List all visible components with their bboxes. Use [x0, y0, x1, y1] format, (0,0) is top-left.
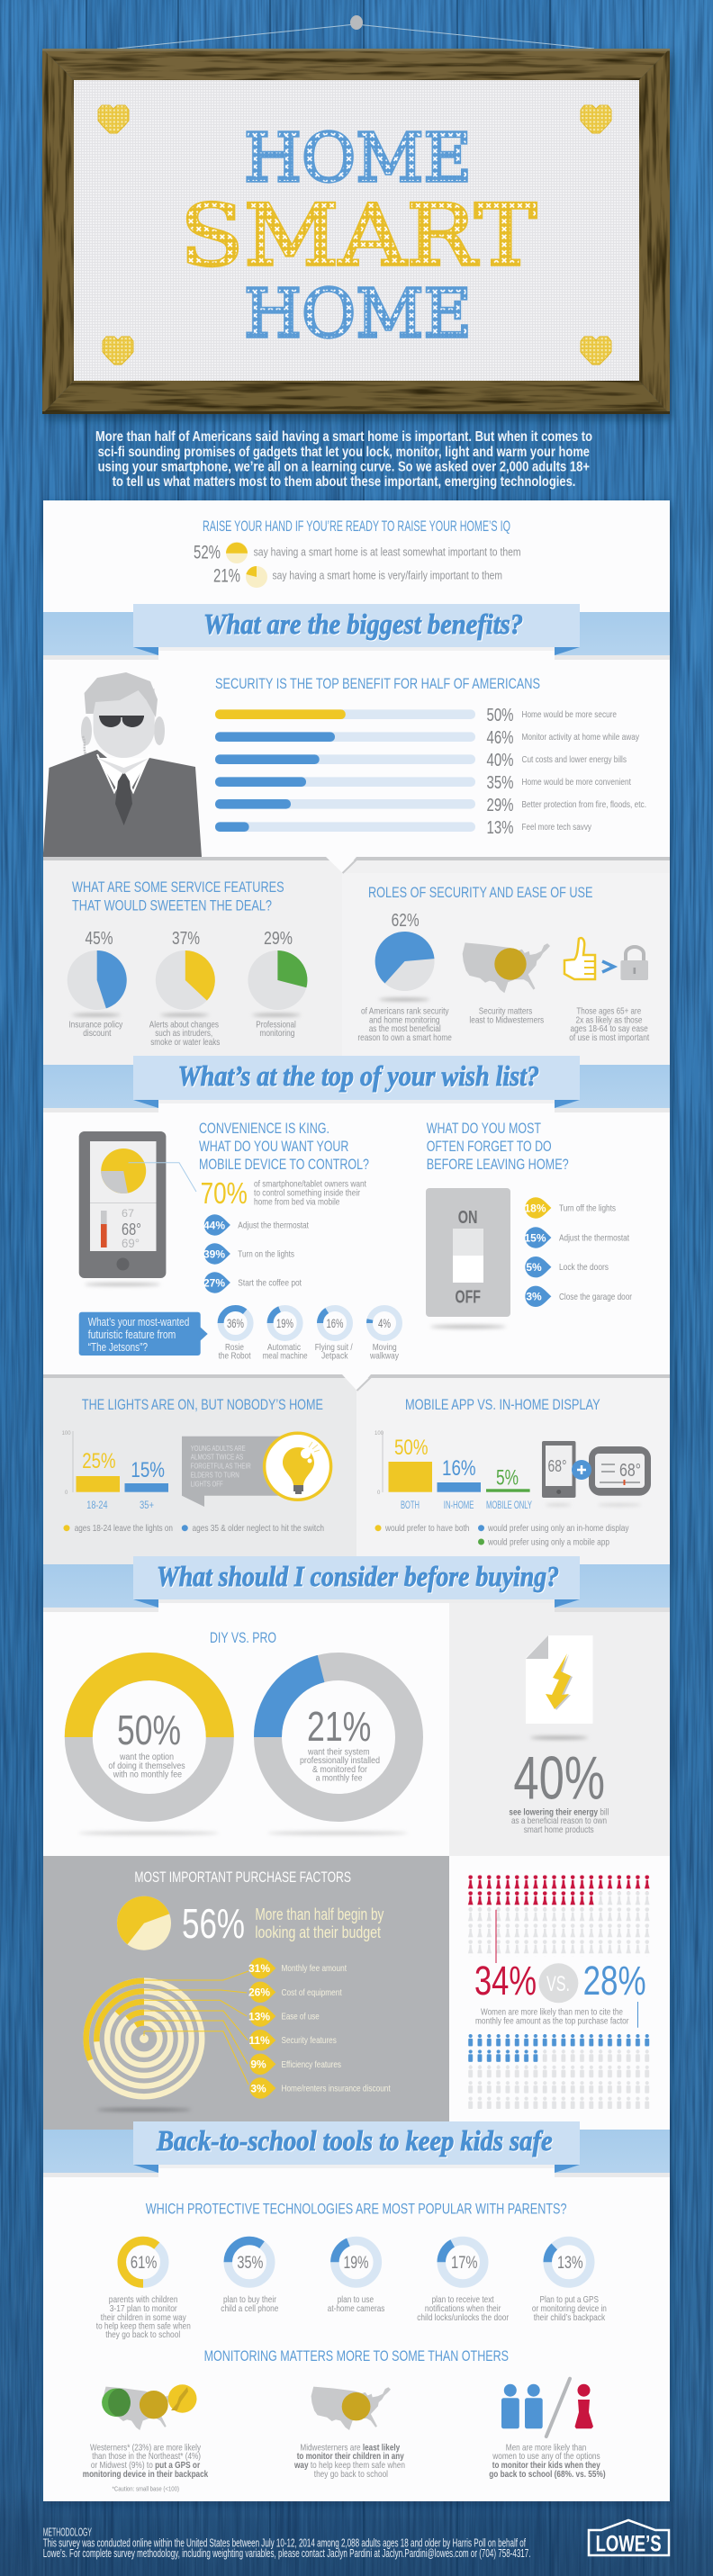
map: west, midwest, northeast — [102, 2384, 197, 2430]
pie: 45% insurance discount: 45% — [85, 929, 113, 949]
list: device controls: 44% — [203, 1219, 225, 1231]
list: forgotten tasks: Turn off the lights — [559, 1202, 616, 1213]
caption: Women are more likely than men to cite the — [481, 2007, 623, 2018]
donut: 13% GPS — [532, 2241, 607, 2323]
list: forgotten tasks — [524, 1197, 632, 1307]
bar chart: lights by age: 25% — [82, 1449, 116, 1473]
icon: tablet — [79, 1131, 196, 1286]
stat: 70%: 70% — [201, 1176, 248, 1210]
bar 46%: 46% — [486, 728, 514, 748]
stat: 21%: 21% — [213, 565, 240, 587]
stat: 34% vs 28%: 34% — [474, 1958, 537, 2004]
donut: 21% pro: want their system — [307, 1746, 370, 1757]
bar chart: display preference: 50% — [394, 1436, 429, 1460]
pie: 62%: reason to own a smart home — [357, 1032, 452, 1043]
donut: 17% notifications — [417, 2241, 510, 2323]
pie: 56% budget: 56% — [182, 1900, 245, 1947]
donut: 50% DIY — [78, 1667, 220, 1834]
donut: 4% moving walkway: Moving — [373, 1342, 397, 1353]
donut: 61% parents: they go back to school — [105, 2329, 180, 2340]
shirt — [97, 758, 149, 801]
heading: WHAT ARE SOME SERVICE FEATURES — [72, 878, 284, 896]
bar chart: lights by age: 100 — [62, 1431, 71, 1437]
bar chart: display preference: 0 — [377, 1491, 381, 1496]
heading: DIY VS. PRO — [210, 1629, 276, 1646]
bar chart: lights by age: 15% — [131, 1458, 165, 1482]
callout: young adults — [182, 1437, 290, 1507]
donut: 50% DIY: want the option — [119, 1752, 174, 1762]
icon: thumb greater than lock: 2x as likely as those — [576, 1015, 643, 1026]
panel: raise your hand — [194, 518, 521, 588]
caption: men: to monitor their kids when they — [492, 2460, 600, 2471]
list: device controls: Start the coffee pot — [238, 1278, 302, 1289]
pictogram: men — [466, 2002, 652, 2112]
donut: 61% parents: parents with children — [109, 2294, 178, 2305]
panel: service features and roles background — [43, 857, 670, 1065]
icon: phone plus thermostat: 68° — [547, 1457, 567, 1475]
bar chart: display preference: 100 — [375, 1431, 384, 1437]
callout: Jetsons question: “The Jetsons”? — [88, 1340, 148, 1354]
tie — [115, 771, 132, 825]
donut: 61% parents — [96, 2241, 191, 2340]
icon: thumb greater than lock: of use is most important — [569, 1032, 649, 1043]
main white panel — [43, 500, 672, 2504]
list: device controls: 27% — [203, 1276, 225, 1289]
bar 50% — [215, 706, 617, 725]
bar chart: display preference: MOBILE ONLY — [486, 1499, 532, 1511]
icon: light switch: ON — [458, 1208, 477, 1228]
picture frame with cross-stitch title — [42, 49, 672, 419]
bar chart: lights by age: 0 — [65, 1491, 68, 1496]
icon: phone plus thermostat: 68° — [619, 1461, 641, 1481]
heading: BEFORE LEAVING HOME? — [427, 1156, 569, 1173]
ribbon: What are the biggest benefits? — [43, 604, 670, 660]
bar chart: lights by age — [62, 1431, 168, 1511]
legend: lights: ages 35 & older neglect to hit the switch — [193, 1523, 324, 1534]
pie: 29% professional monitoring: 29% — [264, 929, 293, 949]
caption: men: women to use any of the options — [492, 2451, 600, 2462]
stat: 21% — [213, 565, 502, 588]
stat: 70%: to control something inside their — [254, 1188, 360, 1199]
caption: midwesterners: Midwesterners are least likely — [300, 2443, 400, 2454]
panel: most important purchase factors — [43, 1856, 449, 2130]
donut: 61% parents: 3-17 plan to monitor — [110, 2303, 177, 2314]
icon: stitched hearts — [98, 105, 611, 365]
donut: 4% moving walkway: walkway — [369, 1350, 400, 1361]
methodology footer — [43, 2526, 530, 2560]
donut: 36% Rosie the Robot: 36% — [227, 1316, 244, 1330]
intro paragraph: to tell us what matters most to them about these important, emerging technologies. — [113, 474, 575, 490]
pie: 37% alerts: such as intruders, — [155, 1028, 212, 1039]
intro paragraph: sci-fi sounding promises of gadgets that let you lock, monitor, light and warm your home — [98, 445, 590, 460]
callout: young adults: YOUNG ADULTS ARE — [191, 1444, 246, 1453]
bar 13%: 13% — [486, 818, 514, 838]
donut: 21% pro: & monitored for — [312, 1764, 367, 1775]
callout: Jetsons question — [79, 1312, 208, 1356]
pie: 56% budget: More than half begin by — [255, 1905, 384, 1923]
donut: 19% cameras: plan to use — [338, 2294, 374, 2305]
bar 13% — [215, 818, 592, 838]
donut: 19% cameras: 19% — [344, 2253, 369, 2273]
list: purchase factors: 31% — [248, 1962, 270, 1975]
pie: 62%: and home monitoring — [369, 1015, 440, 1026]
caption: men — [489, 2443, 606, 2480]
heading — [427, 1120, 569, 1173]
bar 40%: Cut costs and lower energy bills — [522, 754, 627, 765]
bar 50%: Home would be more secure — [522, 709, 617, 720]
callout: young adults: FORGETFUL AS THEIR — [191, 1461, 251, 1470]
panel: convenience is king — [79, 1120, 400, 1361]
donut: 36% Rosie the Robot: the Robot — [219, 1350, 251, 1361]
donut: 16% flying suit: Jetpack — [321, 1350, 348, 1361]
stat: 52%: 52% — [194, 542, 221, 563]
ears — [81, 716, 92, 745]
donut: 36% Rosie the Robot: Rosie — [225, 1342, 244, 1353]
bar 35%: 35% — [486, 773, 514, 793]
donut: 36% Rosie the Robot — [219, 1309, 251, 1361]
list: forgotten tasks: Adjust the thermostat — [559, 1233, 629, 1244]
caption: westerners — [83, 2443, 208, 2480]
chart: concentric purchase rings — [86, 1971, 248, 2112]
donut: 16% flying suit — [315, 1309, 353, 1361]
heading: OFTEN FORGET TO DO — [427, 1138, 552, 1155]
icon: light switch: OFF — [456, 1287, 481, 1307]
stat: 21%: say having a smart home is very/fairly important to them — [272, 569, 502, 581]
pie: 62% — [357, 911, 452, 1043]
heading: WHICH PROTECTIVE TECHNOLOGIES ARE MOST POPULAR WITH PARENTS? — [146, 2200, 566, 2218]
pie: 29% professional monitoring: Professional — [256, 1019, 296, 1030]
list: purchase factors — [248, 1958, 391, 2099]
icon: thumb greater than lock: ages 18-64 to say ease — [571, 1023, 648, 1034]
stat: 34% vs 28%: VS. — [546, 1972, 570, 1996]
legend: display preference: would prefer to have both — [384, 1523, 470, 1534]
donut: 35% cell phone: 35% — [237, 2253, 263, 2273]
panel: energy bill stat — [509, 1635, 609, 1835]
donut: 17% notifications: child locks/unlocks the door — [417, 2312, 510, 2323]
ribbon: What's at the top of your wish list? — [43, 1056, 670, 1112]
donut: 4% moving walkway: 4% — [378, 1316, 391, 1330]
list: forgotten tasks: Lock the doors — [559, 1262, 609, 1273]
donut: 21% pro: a monthly fee — [316, 1773, 363, 1784]
caption: westerners: Westerners* (23%) are more likely — [90, 2443, 202, 2454]
pie: 45% insurance discount: Insurance policy — [68, 1019, 123, 1030]
caption: westerners: monitoring device in their backpack — [83, 2469, 208, 2480]
donut: 50% DIY: 50% — [117, 1707, 181, 1753]
stat: 52%: say having a smart home is at least somewhat important to them — [254, 545, 521, 558]
list: device controls: 39% — [203, 1247, 225, 1260]
stat: 70% — [201, 1176, 366, 1210]
suit — [43, 750, 202, 857]
pie: 37% alerts — [149, 929, 220, 1048]
callout: Jetsons question: futuristic feature from — [88, 1328, 176, 1341]
donut: 19% meal machine: Automatic — [267, 1342, 301, 1353]
list: purchase factors: Efficiency features — [281, 2059, 341, 2070]
donut: 19% meal machine: 19% — [276, 1316, 293, 1330]
legend: display preference — [375, 1523, 629, 1548]
icon: tablet: 69° — [122, 1236, 140, 1250]
icon: men versus women — [501, 2379, 593, 2436]
caption: monthly fee amount as the top purchase factor — [475, 2016, 629, 2027]
list: purchase factors: Security features — [281, 2035, 337, 2046]
list: forgotten tasks: 3% — [526, 1291, 542, 1303]
legend: lights — [63, 1523, 324, 1534]
title line: HOME: HOME — [244, 275, 472, 353]
wooden frame — [42, 49, 670, 414]
bar 29% — [215, 796, 646, 815]
donut: 61% parents: their children in some way — [101, 2312, 186, 2323]
list: device controls: Turn on the lights — [238, 1249, 294, 1260]
pie: 56% budget: looking at their budget — [255, 1923, 381, 1941]
donut: 19% meal machine — [263, 1309, 308, 1361]
donut: 19% cameras: at-home cameras — [328, 2303, 384, 2314]
donut: 21% pro — [267, 1667, 409, 1834]
bar chart: lights by age: 18-24 — [86, 1499, 108, 1511]
list: purchase factors: 9% — [250, 2058, 266, 2071]
bar 46% — [215, 728, 640, 748]
logo: Lowe's — [589, 2520, 669, 2556]
panel: monitoring matters — [83, 2347, 606, 2493]
bar 50%: 50% — [486, 706, 514, 725]
ribbon: Back-to-school tools to keep kids safe: Back-to-school tools to keep kids safe — [156, 2124, 553, 2157]
ribbon: What's at the top of your wish list?: What’s at the top of your wish list? — [178, 1059, 539, 1092]
callout: young adults: ALMOST TWICE AS — [191, 1453, 243, 1462]
stat: 40%: as a beneficial reason to own — [511, 1815, 607, 1826]
bar 40% — [215, 751, 627, 770]
icon: phone plus thermostat — [542, 1441, 651, 1506]
panel: roles of security and ease of use — [357, 884, 649, 1043]
donut: 50% DIY: of doing it themselves — [108, 1761, 185, 1771]
donut: 50% DIY: with no monthly fee — [113, 1770, 182, 1780]
donut charts: Jetsons features — [219, 1309, 400, 1361]
donut: 4% moving walkway — [369, 1309, 400, 1361]
pie: 62%: as the most beneficial — [369, 1023, 441, 1034]
heading: CONVENIENCE IS KING. — [199, 1120, 329, 1137]
stat: 70%: of smartphone/tablet owners want — [254, 1179, 366, 1190]
bar chart: display preference — [375, 1431, 532, 1511]
caption — [475, 2007, 629, 2027]
donut: 35% cell phone — [221, 2241, 278, 2314]
donut: 35% cell phone: plan to buy their — [223, 2294, 276, 2305]
legend: display preference: would prefer using only a mobile app — [487, 1537, 609, 1548]
list: forgotten tasks: 18% — [524, 1202, 546, 1214]
pie: 37% alerts: 37% — [172, 929, 200, 949]
list: purchase factors: Ease of use — [281, 2011, 320, 2022]
donut: 35% cell phone: child a cell phone — [221, 2303, 278, 2314]
bar chart: display preference: BOTH — [401, 1499, 420, 1511]
list: forgotten tasks: 15% — [524, 1231, 546, 1244]
donut: 13% GPS: 13% — [557, 2253, 583, 2273]
footnote: *Caution: small base (<100) — [112, 2484, 179, 2493]
stat: 40%: see lowering their energy bill — [509, 1807, 609, 1818]
caption: midwesterners: they go back to school — [314, 2469, 388, 2480]
bar 13%: Feel more tech savvy — [522, 822, 592, 833]
icon: thumb greater than lock — [564, 938, 649, 1043]
stat: 70%: home from bed via mobile — [254, 1197, 340, 1208]
heading: THE LIGHTS ARE ON, BUT NOBODY’S HOME — [82, 1396, 323, 1413]
bar chart: display preference: IN-HOME — [444, 1499, 474, 1511]
icon: document with lightning — [526, 1635, 592, 1739]
bar 29%: 29% — [486, 796, 514, 815]
heading: MONITORING MATTERS MORE TO SOME THAN OTHERS — [204, 2347, 509, 2364]
pie: 62%: of Americans rank security — [361, 1006, 449, 1017]
map: midwest — [463, 942, 550, 1026]
caption: midwesterners — [293, 2443, 405, 2480]
donut: 17% notifications: notifications when their — [425, 2303, 501, 2314]
pictogram: women — [466, 1875, 652, 1963]
methodology footer: METHODOLOGY — [43, 2526, 92, 2538]
caption: westerners: or Midwest (9%) to put a GPS or — [91, 2460, 200, 2471]
heading: THAT WOULD SWEETEN THE DEAL? — [72, 897, 272, 914]
stat: 52% — [194, 542, 521, 563]
bar chart: benefits — [215, 706, 646, 838]
donut: 16% flying suit: 16% — [326, 1316, 344, 1330]
ribbon: What are the biggest benefits?: What are the biggest benefits? — [203, 608, 523, 640]
donut: 17% notifications: 17% — [451, 2253, 477, 2273]
heading: WHAT DO YOU MOST — [427, 1120, 541, 1137]
panel: lights and display background — [43, 1374, 670, 1564]
caption: men: Men are more likely than — [506, 2443, 586, 2454]
bar 29%: Better protection from fire, floods, etc. — [522, 799, 646, 810]
caption: midwesterners: way to help keep them safe when — [293, 2460, 405, 2471]
map: midwest: least to Midwesterners — [469, 1015, 544, 1026]
list: purchase factors: Home/renters insurance discount — [281, 2083, 391, 2094]
intro paragraph: More than half of Americans said having a smart home is important. But when it comes to — [95, 429, 592, 445]
panel: mobile app vs in-home display — [375, 1396, 651, 1548]
callout: young adults: LIGHTS OFF — [191, 1479, 223, 1488]
bar chart: display preference: 5% — [496, 1465, 519, 1491]
pie: 29% professional monitoring — [248, 929, 307, 1039]
donut: 13% GPS: or monitoring device in — [532, 2303, 607, 2314]
list: device controls: Adjust the thermostat — [238, 1220, 309, 1231]
list: purchase factors: 3% — [250, 2082, 266, 2094]
stat: 40% — [509, 1744, 609, 1835]
caption: men: go back to school (68%. vs. 55%) — [489, 2469, 606, 2480]
map: midwest — [311, 2387, 391, 2430]
bar 46%: Monitor activity at home while away — [522, 732, 640, 743]
ribbon: What should I consider before buying?: What should I consider before buying? — [157, 1560, 559, 1592]
heading: MOBILE DEVICE TO CONTROL? — [199, 1156, 369, 1173]
donut: 61% parents: 61% — [131, 2253, 157, 2273]
heading — [199, 1120, 369, 1173]
bar chart: display preference: 16% — [442, 1456, 476, 1481]
intro paragraph: using your smartphone, we’re all on a learning curve. So we asked over 2,000 adults 18+ — [98, 459, 590, 475]
panel: forget before leaving home — [426, 1120, 632, 1329]
callout: Jetsons question: What’s your most-wanted — [88, 1315, 189, 1329]
panel: energy bill background — [449, 1599, 670, 1856]
donut: 19% cameras — [328, 2241, 384, 2314]
callout: young adults: ELDERS TO TURN — [191, 1470, 239, 1479]
pie: 37% alerts: Alerts about changes — [149, 1019, 219, 1030]
heading: MOBILE APP VS. IN-HOME DISPLAY — [405, 1396, 600, 1413]
pie: 45% insurance discount — [68, 929, 127, 1039]
list: purchase factors: Monthly fee amount — [281, 1963, 347, 1974]
list: purchase factors: Cost of equipment — [281, 1987, 342, 1998]
bar chart: lights by age: 35+ — [140, 1499, 154, 1511]
stat: 40%: smart home products — [524, 1824, 594, 1835]
panel: DIY vs pro — [78, 1629, 409, 1834]
legend: lights: ages 18-24 leave the lights on — [75, 1523, 173, 1534]
pie: 37% alerts: smoke or water leaks — [150, 1037, 220, 1048]
bar 35% — [215, 773, 631, 793]
cross-stitch canvas — [74, 80, 639, 381]
heading: RAISE YOUR HAND IF YOU’RE READY TO RAISE YOUR HOME’S IQ — [203, 518, 510, 535]
intro paragraph — [95, 429, 592, 490]
heading: ROLES OF SECURITY AND EASE OF USE — [368, 884, 592, 901]
pie: 56% budget — [117, 1896, 384, 1950]
heading: WHAT DO YOU WANT YOUR — [199, 1138, 348, 1155]
list: purchase factors: 11% — [248, 2034, 270, 2047]
donut: 13% GPS: Plan to put a GPS — [540, 2294, 599, 2305]
icon: light bulb — [265, 1433, 331, 1500]
list: purchase factors: 13% — [248, 2010, 270, 2022]
logo: Lowe's: LOWE’S — [596, 2531, 662, 2556]
icon: tablet: 68° — [122, 1220, 141, 1238]
panel: protective technologies — [96, 2200, 607, 2340]
panel: women vs men — [466, 1875, 652, 2112]
ribbon: Back-to-school tools to keep kids safe — [43, 2121, 670, 2177]
stat: 34% vs 28%: 28% — [583, 1958, 646, 2004]
panel: service features — [68, 878, 307, 1048]
stat: 40%: 40% — [513, 1744, 605, 1813]
legend: display preference: would prefer using only an in-home display — [487, 1523, 629, 1534]
map: midwest: Security matters — [479, 1006, 532, 1017]
earpiece — [83, 736, 86, 754]
panel: lights are on — [62, 1396, 331, 1534]
illustration: security man — [43, 672, 202, 857]
pie: 62%: 62% — [392, 911, 420, 931]
title line: HOME: HOME — [244, 120, 472, 197]
hair — [85, 672, 158, 717]
donut: 21% pro: 21% — [307, 1703, 371, 1750]
donut: 21% pro: professionally installed — [300, 1755, 380, 1766]
caption: westerners: than those in the Northeast* (4%) — [92, 2451, 201, 2462]
hanging nail and string — [117, 15, 594, 49]
donut: 16% flying suit: Flying suit / — [315, 1342, 353, 1353]
donut: 19% meal machine: meal machine — [263, 1350, 308, 1361]
heading: security benefit: SECURITY IS THE TOP BENEFIT FOR HALF OF AMERICANS — [215, 675, 540, 692]
list: purchase factors: 26% — [248, 1986, 270, 1999]
bar 35%: Home would be more convenient — [522, 777, 631, 788]
stat: 34% vs 28% — [474, 1958, 646, 2004]
donut: 13% GPS: their child’s backpack — [534, 2312, 606, 2323]
list: device controls — [203, 1214, 309, 1293]
icon: thumb greater than lock: Those ages 65+ are — [576, 1006, 641, 1017]
title line: SMART: SMART — [180, 187, 537, 285]
bar 40%: 40% — [486, 751, 514, 770]
donut: 61% parents: to help keep them safe when — [96, 2320, 191, 2331]
pie: 29% professional monitoring: monitoring — [259, 1028, 295, 1039]
sunglasses — [99, 716, 144, 727]
ribbon: What should I consider before buying? — [43, 1556, 670, 1612]
icon: tablet: 67 — [122, 1207, 134, 1220]
pie: 45% insurance discount: discount — [83, 1028, 112, 1039]
donut: 17% notifications: plan to receive text — [432, 2294, 494, 2305]
list: forgotten tasks: 5% — [526, 1261, 542, 1274]
list: forgotten tasks: Close the garage door — [559, 1292, 632, 1302]
heading: MOST IMPORTANT PURCHASE FACTORS — [134, 1869, 351, 1886]
face — [94, 689, 155, 758]
icon: light switch — [426, 1188, 510, 1329]
heading — [72, 878, 284, 914]
caption: midwesterners: to monitor their children in any — [297, 2451, 404, 2462]
